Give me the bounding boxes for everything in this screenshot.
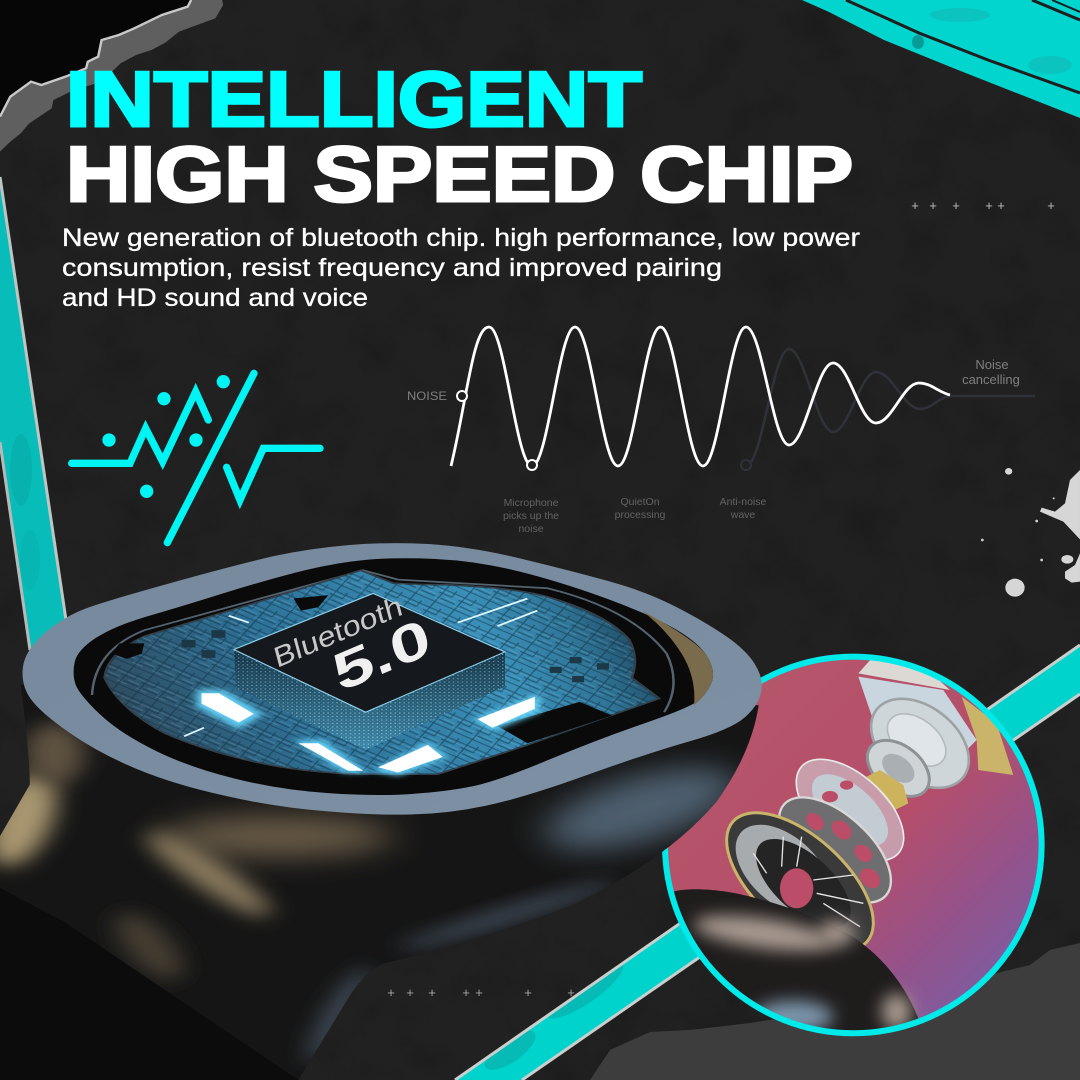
teal strip: bottom diagonal [455,645,1080,1080]
inset circle: driver exploded view [650,657,1042,1040]
chip right side [366,652,505,750]
description text: consumption, resist frequency and improved pairing [62,254,722,282]
ear tip [674,889,918,1030]
chart: noise cancelling wave [407,327,1035,535]
label: noise cancelling: Noise [975,357,1009,372]
plus marks: bottom: + [406,985,414,1000]
label: quieton: QuietOn [620,496,660,508]
plus marks: top right: + [1047,198,1055,213]
teal strip: top right [802,0,1080,118]
plus marks: bottom: + [387,985,395,1000]
plus marks: bottom: + [462,985,470,1000]
label: noise cancelling: cancelling [962,372,1020,387]
glowing bars [201,693,535,772]
description text: and HD sound and voice [62,284,368,312]
board cutouts [112,595,612,743]
description text [62,224,860,312]
plus marks: bottom: + [428,985,436,1000]
cyan ring [665,657,1042,1033]
ledge [92,570,674,712]
title [66,55,853,218]
title: INTELLIGENT [66,55,642,143]
glowing bars glow [197,690,540,776]
plus marks: top right [911,198,1055,213]
torn paper: bottom right [590,943,1080,1080]
bracket plate [858,658,950,690]
plus marks: top right: + [929,198,937,213]
icon: noise cancelling pulse [72,373,320,543]
plus marks: bottom: + [567,985,575,1000]
plus marks: bottom: + [475,985,483,1000]
diaphragm disc [725,811,875,946]
label: anti-noise: Anti-noise [720,496,766,508]
inner wall tan reflection [642,611,713,705]
noise start marker [457,391,467,401]
perforated plate [778,796,892,904]
torn paper: top left corner [0,0,223,152]
label: microphone: picks up the [503,510,559,522]
anti-noise dim wave [746,349,1035,466]
gold collar [867,770,908,810]
label: noise: NOISE [407,389,447,403]
plus marks: bottom [387,985,575,1000]
label: quieton: processing [615,509,666,521]
chip top [234,593,505,712]
rim [23,543,762,815]
chip label: 5.0: 5.0 [327,608,437,704]
paint splatter: right edge [981,468,1080,597]
plus marks: top right: + [997,198,1005,213]
circuit board [104,570,659,774]
microphone marker [527,460,537,470]
chip side glow [234,650,505,750]
earbud with exposed chip [0,543,762,1080]
board traces [104,570,659,774]
label: anti-noise: wave [730,509,755,521]
small chips [182,630,609,682]
gold bracket [962,697,1013,775]
plus marks: top right: + [911,198,919,213]
earbud body [0,685,759,1080]
chip label: bluetooth: Bluetooth [270,590,406,674]
teal strip: left [0,177,66,660]
anti-noise marker [741,460,751,470]
body highlights [0,723,755,1080]
plus marks: bottom: + [524,985,532,1000]
title: HIGH SPEED CHIP [66,130,853,218]
chip left side [234,650,366,750]
lens small [866,738,931,798]
plus marks: top right: + [985,198,993,213]
label: microphone: noise [518,523,544,535]
lens large [870,698,970,790]
label: microphone: Microphone [504,497,559,509]
plus marks: top right: + [952,198,960,213]
spoked ring [795,758,904,860]
inner cavity [74,558,713,795]
description text: New generation of bluetooth chip. high performance, low power [62,224,860,252]
noise white wave [451,327,950,466]
